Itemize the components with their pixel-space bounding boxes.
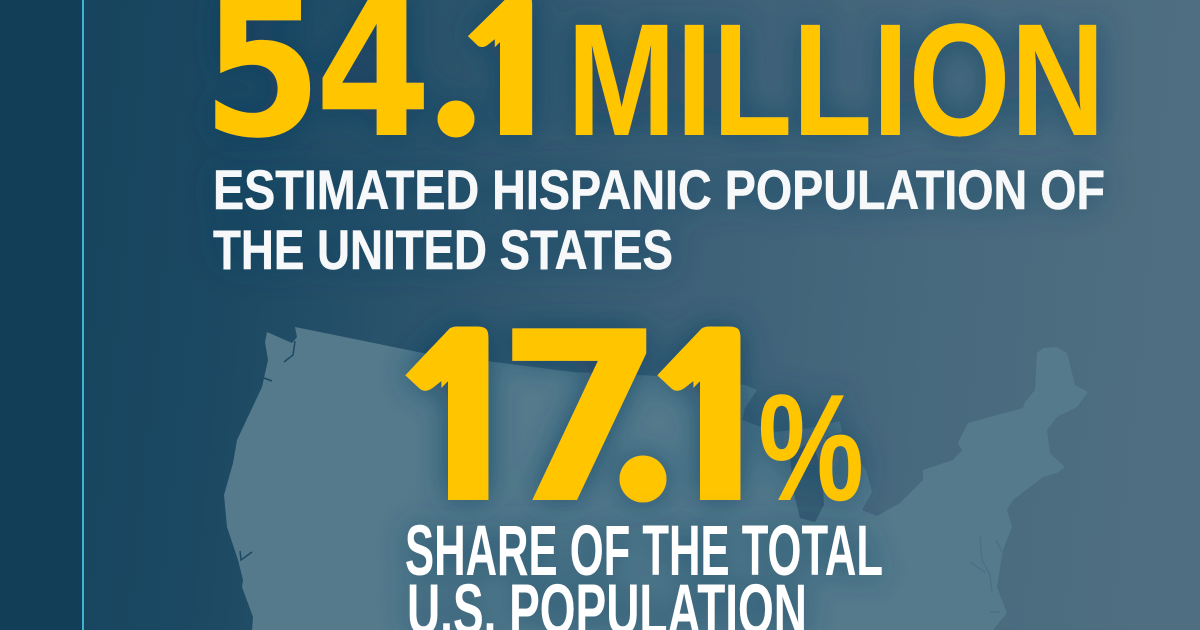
caption: share of the total U.S. population: SHARE OF THE TOTAL [405,512,883,591]
stat: 17.1 percent: 1 [376,313,542,537]
stat: 17.1 percent: % [758,363,864,533]
left panel [0,0,83,630]
stat: 54.1 million [215,0,1111,148]
stat: 17.1 percent [399,315,872,515]
caption: estimated Hispanic population: THE UNITED STATES [213,218,673,281]
vertical accent line [82,0,84,630]
caption: estimated Hispanic population [213,158,1105,281]
map of the United States [224,327,1088,630]
stat: 17.1 percent: . [588,237,698,574]
stat: 17.1 percent: 1 [628,313,794,537]
caption: share of the total U.S. population [405,512,883,630]
stat: 17.1 percent: 7 [496,282,666,556]
